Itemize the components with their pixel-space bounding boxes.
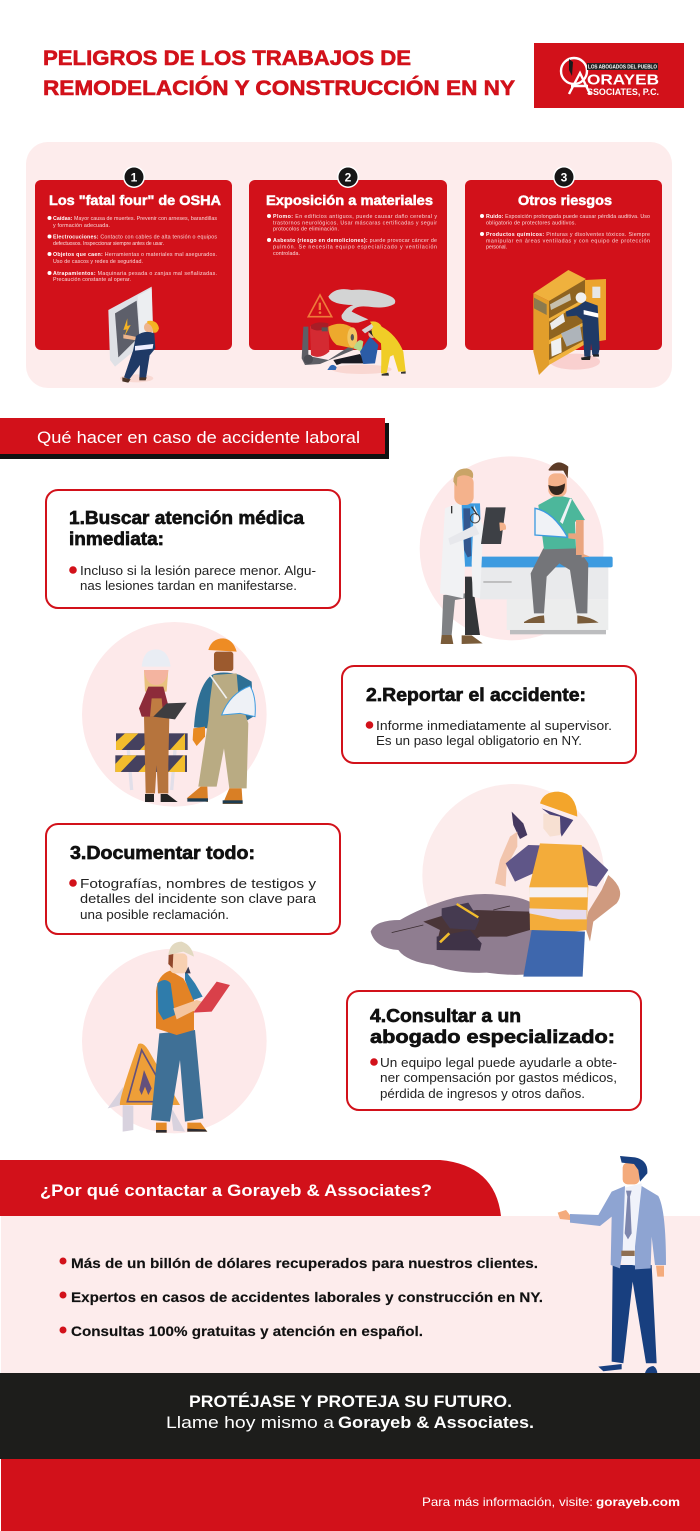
step 3 box: 3.Documentar todo: (70, 843, 255, 863)
card 3: otros riesgos: manipular en áreas ventiladas y con equipo de protección (486, 238, 650, 244)
list of reasons: Expertos en casos de accidentes laborales y construcción en NY. (71, 1289, 543, 1305)
card 2: materiales: trastornos neurológicos. Usar máscaras certificadas y seguir (273, 220, 437, 226)
icon: worker at electrical panel (108, 287, 159, 383)
logo: SSOCIATES, P.C. (587, 87, 659, 97)
card 1: fatal four (35, 166, 232, 383)
card 1: fatal four: Uso de cascos y redes de seguridad. (53, 259, 143, 265)
title: PELIGROS DE LOS TRABAJOS DE (43, 47, 411, 70)
illustration: worker with radio and collapsed ground (371, 784, 620, 977)
logo (534, 43, 684, 108)
step 4 box: Un equipo legal puede ayudarle a obte- (380, 1055, 617, 1070)
step 4 box: ner compensación por gastos médicos, (380, 1070, 617, 1085)
card 3: otros riesgos: personal. (486, 244, 507, 250)
step 1 box: inmediata: (69, 529, 164, 549)
card 3: otros riesgos: Ruido: Exposición prolongada puede causar pérdida auditiva. Uso (486, 214, 650, 220)
step 3 box: detalles del incidente son clave para (80, 891, 317, 906)
card 3: otros riesgos: Productos químicos: Pinturas y disolventes tóxicos. Siempre (486, 232, 650, 238)
panel: hazards (26, 142, 672, 388)
card 2: materiales: protocolos de eliminación. (273, 226, 339, 232)
banner: call to action: Llame hoy mismo a (166, 1413, 335, 1432)
step 4 box: pérdida de ingresos y otros daños. (380, 1086, 585, 1101)
step 2 box: Es un paso legal obligatorio en NY. (376, 733, 582, 748)
card 3: otros riesgos: 3 (561, 170, 568, 184)
card 1: fatal four: y formación adecuada. (53, 223, 110, 229)
card 3: otros riesgos (465, 166, 662, 375)
card 1: fatal four: Los "fatal four" de OSHA (49, 192, 221, 208)
card 1: fatal four: Atrapamientos: Maquinaria pesada o zanjas mal señalizadas. (53, 271, 217, 277)
step 3 box (46, 824, 340, 934)
banner: call to action: Gorayeb & Associates. (338, 1413, 534, 1432)
step 2 box (342, 666, 636, 763)
card 1: fatal four: Precaución constante al operar. (53, 277, 131, 283)
title (43, 47, 515, 100)
card 3: otros riesgos: Otros riesgos (518, 192, 612, 208)
logo: LOS ABOGADOS DEL PUEBLO (588, 64, 657, 70)
list of reasons: Consultas 100% gratuitas y atención en español. (71, 1323, 423, 1339)
footer (1, 1459, 700, 1531)
title: REMODELACIÓN Y CONSTRUCCIÓN EN NY (43, 76, 515, 100)
card 2: materiales: Exposición a materiales (266, 192, 433, 208)
step 2 box: 2.Reportar el accidente: (366, 685, 586, 705)
card 2: materiales: controlada. (273, 251, 300, 257)
card 2: materiales: Asbesto (riesgo en demoliciones): puede provocar cáncer de (273, 238, 437, 244)
section heading: accident (0, 418, 389, 459)
card 1: fatal four: 1 (131, 170, 138, 184)
heading tab: ¿Por qué contactar a Gorayeb & Associates? (40, 1181, 432, 1200)
illustration: worker with clipboard (82, 942, 267, 1133)
card 2: materiales (249, 166, 447, 376)
step 1 box: 1.Buscar atención médica (69, 508, 305, 528)
card 1: fatal four: Objetos que caen: Herramientas o materiales mal asegurados. (53, 252, 217, 258)
step 1 box (46, 490, 340, 608)
step 1 box: Incluso si la lesión parece menor. Algu- (80, 563, 316, 578)
illustration: two construction workers (82, 622, 267, 807)
card 3: otros riesgos: obligatorio de protectores auditivos. (486, 220, 576, 226)
step 4 box: 4.Consultar a un (370, 1006, 521, 1026)
step 2 box: Informe inmediatamente al supervisor. (376, 718, 612, 733)
icon: hazardous spill scene (302, 289, 406, 376)
illustration: lawyer in suit (558, 1156, 666, 1374)
icon: worker at chemical cabinet (533, 270, 606, 375)
footer: gorayeb.com (596, 1495, 680, 1509)
card 2: materiales: 2 (345, 170, 352, 184)
step 4 box: abogado especializado: (370, 1027, 615, 1047)
illustration: doctor and patient (420, 456, 613, 644)
card 1: fatal four: Electrocuciones: Contacto con cables de alta tensión o equipos (53, 234, 217, 240)
step 3 box: Fotografías, nombres de testigos y (80, 876, 317, 891)
list of reasons (60, 1255, 543, 1339)
logo: ORAYEB (587, 72, 659, 88)
step 1 box: nas lesiones tardan en manifestarse. (80, 578, 297, 593)
section heading: accident: Qué hacer en caso de accidente laboral (37, 428, 360, 447)
card 2: materiales: pulmón. Se necesita equipo especializado y ventilación (273, 244, 437, 250)
banner: call to action (0, 1373, 700, 1459)
card 1: fatal four: defectuosos. Inspeccionar siempre antes de usar. (53, 241, 164, 247)
step 3 box: una posible reclamación. (80, 907, 229, 922)
step 4 box (347, 991, 641, 1110)
footer: Para más información, visite: (422, 1495, 593, 1509)
heading tab (0, 1160, 501, 1216)
card 2: materiales: Plomo: En edificios antiguos, puede causar daño cerebral y (273, 214, 437, 220)
list of reasons: Más de un billón de dólares recuperados para nuestros clientes. (71, 1255, 538, 1271)
banner: call to action: PROTÉJASE Y PROTEJA SU FUTURO. (189, 1392, 512, 1411)
card 1: fatal four: Caídas: Mayor causa de muertes. Prevenir con arneses, barandillas (53, 216, 217, 222)
panel: why contact (0, 1160, 700, 1373)
